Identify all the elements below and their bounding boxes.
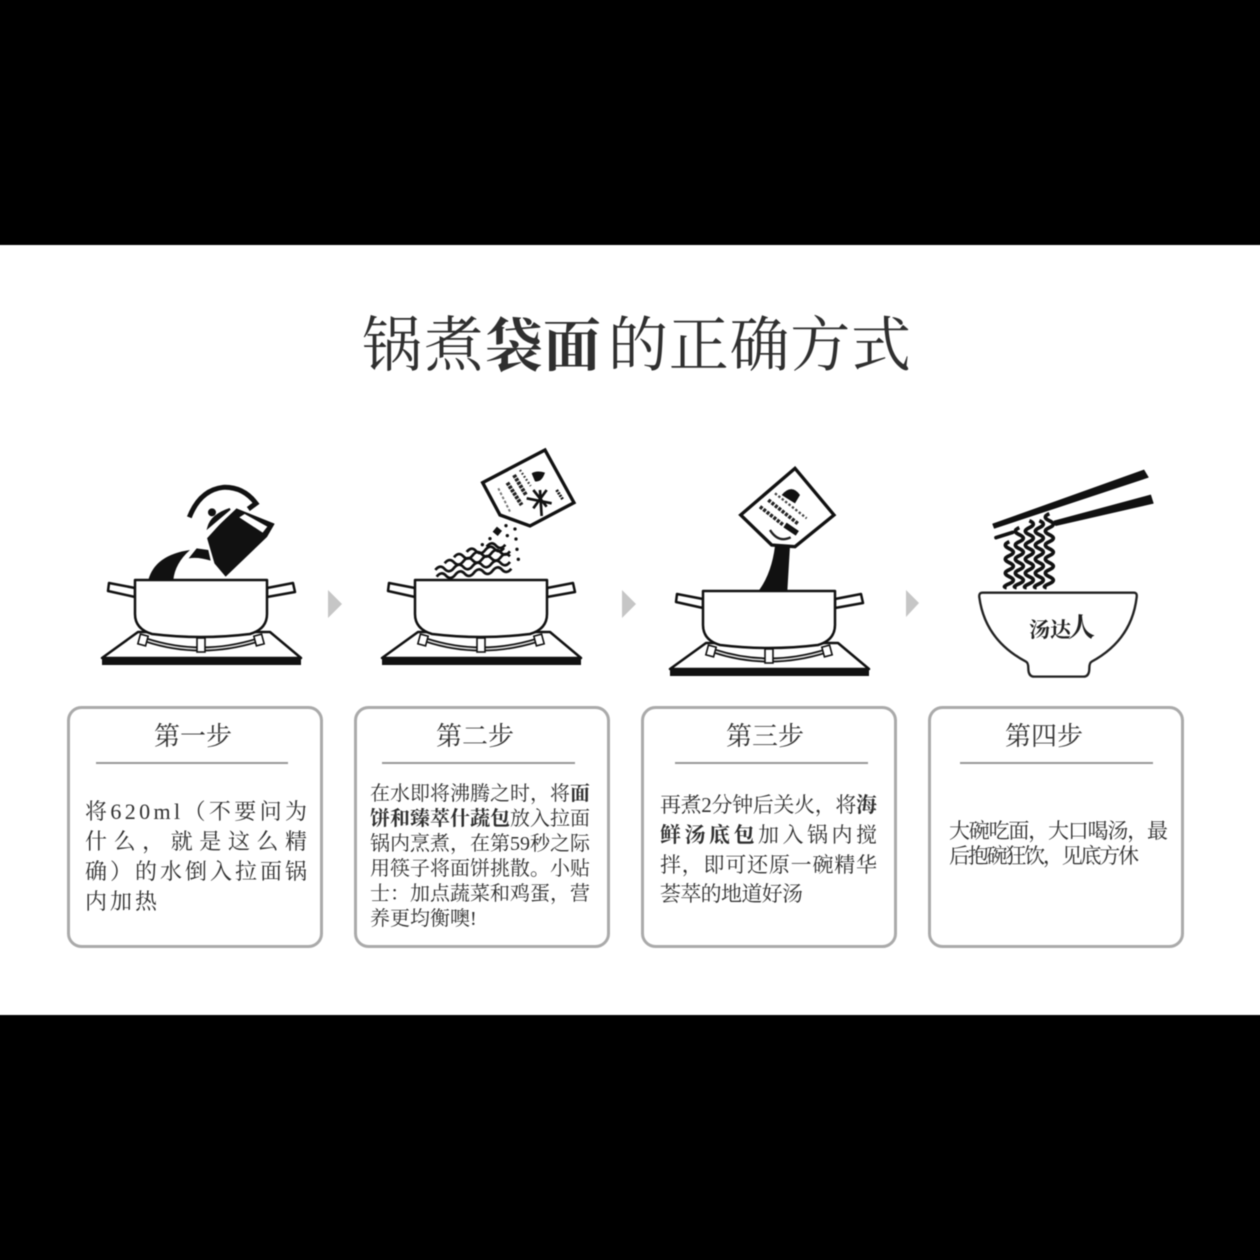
title: 的正确方式 — [608, 313, 911, 379]
icon: step 2 packet pouring into pot — [382, 450, 581, 665]
packet — [483, 450, 574, 526]
falling dots — [481, 524, 520, 561]
panel: step 3 — [642, 708, 896, 946]
text block: step 2: 用筷子将面饼挑散。小贴 — [370, 857, 590, 880]
arrow — [906, 590, 919, 617]
text block: step 2: 在水即将沸腾之时，将面 — [370, 782, 590, 805]
text block: step 1: 内加热 — [85, 889, 158, 914]
text block: step 4 — [949, 819, 1168, 869]
text block: step 2 — [370, 782, 591, 930]
text block: step 3: 鲜汤底包加入锅内搅 — [660, 823, 877, 847]
panel: step 2 — [356, 708, 608, 946]
white content band — [0, 245, 1260, 1015]
text block: step 3 — [660, 793, 877, 906]
text block: step 4: 大碗吃面，大口喝汤，最 — [949, 819, 1168, 844]
title: 袋面 — [485, 314, 601, 379]
panel: step 1 — [68, 708, 322, 946]
icon: step 3 soup packet pouring into pot — [670, 468, 869, 676]
text block: step 2: 养更均衡噢! — [370, 907, 477, 930]
heading: step 3: 第三步 — [726, 722, 804, 751]
arrow — [328, 590, 342, 618]
text block: step 1: 确）的水倒入拉面锅 — [85, 859, 307, 884]
title — [362, 313, 911, 379]
icon: step 1 kettle pouring water into pot — [102, 487, 301, 665]
text block: step 1: 将620ml（不要问为 — [85, 799, 307, 824]
logo text on bowl: 汤达人 — [1029, 613, 1095, 643]
text block: step 2: 饼和臻萃什蔬包放入拉面 — [370, 807, 590, 830]
text block: step 1: 什么，就是这么精 — [85, 829, 307, 855]
icon: step 4 bowl, noodles and chopsticks — [979, 470, 1153, 677]
arrow — [622, 590, 636, 618]
panel: step 4 — [930, 708, 1182, 946]
text block: step 3: 拌，即可还原一碗精华 — [660, 853, 877, 878]
text block: step 2: 士：加点蔬菜和鸡蛋，营 — [370, 882, 590, 905]
text block: step 4: 后抱碗狂饮，见底方休 — [949, 844, 1139, 869]
heading: step 1: 第一步 — [154, 722, 232, 751]
text block: step 2: 锅内烹煮，在第59秒之际 — [370, 832, 591, 855]
heading: step 2: 第二步 — [436, 722, 514, 751]
noodles — [435, 543, 511, 578]
text block: step 1 — [85, 799, 307, 914]
heading: step 4: 第四步 — [1005, 722, 1083, 751]
text block: step 3: 再煮2分钟后关火，将海 — [660, 793, 877, 818]
title: 锅煮 — [362, 313, 484, 379]
text block: step 3: 荟萃的地道好汤 — [660, 882, 803, 906]
